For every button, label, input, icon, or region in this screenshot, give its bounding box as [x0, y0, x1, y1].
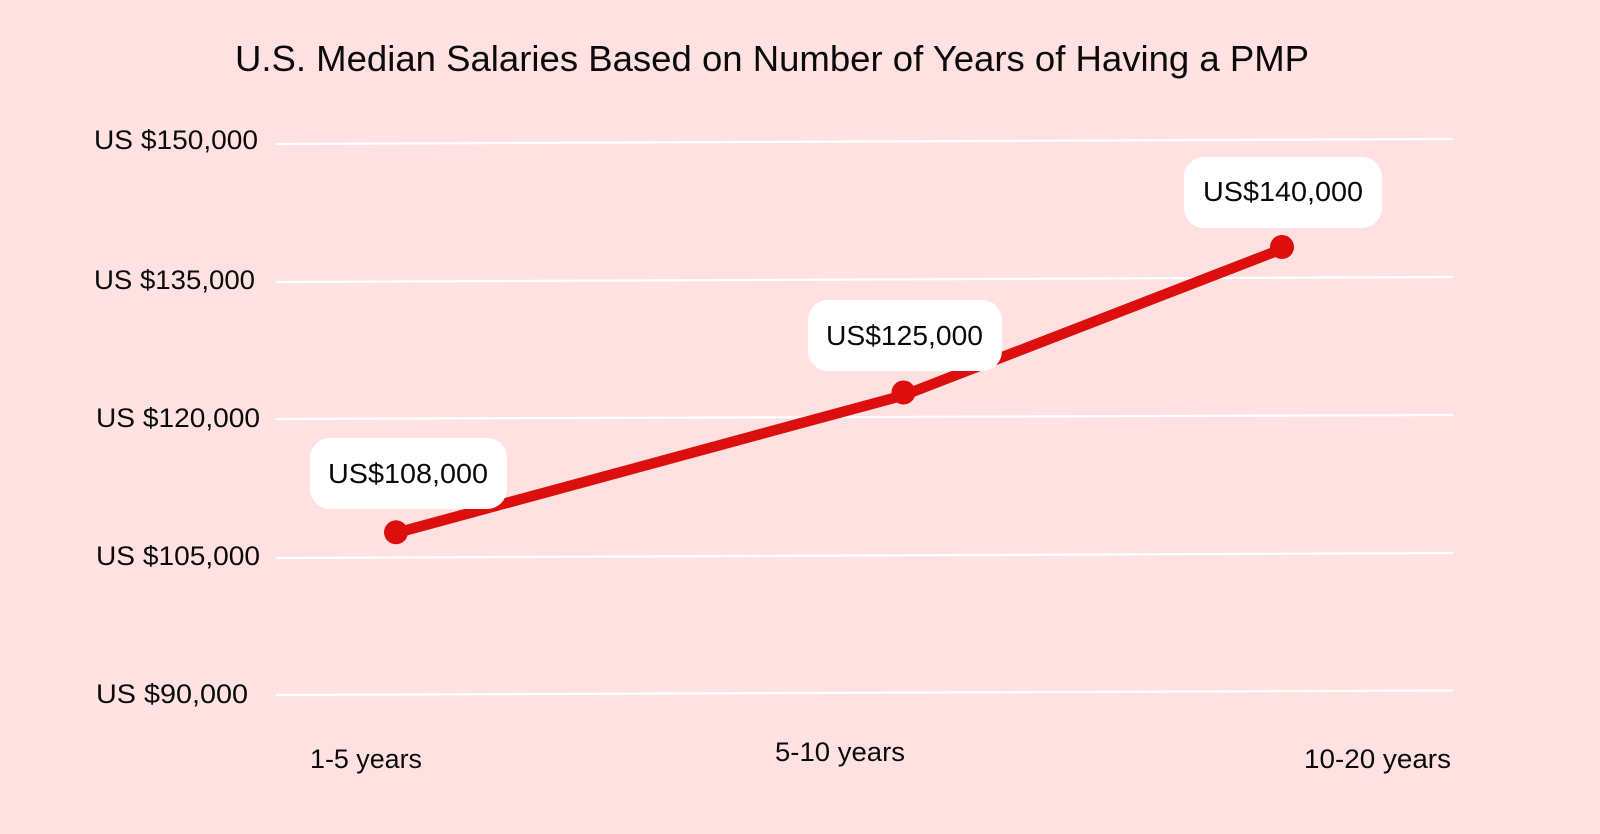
- y-axis labels: US $120,000: [96, 403, 260, 433]
- y-axis labels: US $105,000: [96, 541, 260, 571]
- y-axis labels: US $150,000: [94, 125, 258, 155]
- x-axis labels: 10-20 years: [1304, 744, 1451, 774]
- data point: 1-5 years: [384, 520, 408, 544]
- x-axis labels: 5-10 years: [775, 737, 905, 767]
- title: U.S. Median Salaries Based on Number of Years of Having a PMP: [235, 38, 1309, 79]
- x-axis labels: 1-5 years: [310, 744, 422, 774]
- gridlines: [276, 139, 1453, 695]
- data point: 5-10 years: [892, 380, 916, 404]
- callout: US$125,000: [808, 300, 1002, 371]
- callout: US$140,000: [1184, 157, 1382, 228]
- callout: US$125,000: US$125,000: [826, 320, 983, 351]
- callout: US$140,000: US$140,000: [1203, 176, 1363, 207]
- y-axis labels: [94, 125, 260, 709]
- x-axis labels: [310, 737, 1451, 774]
- data point: 10-20 years: [1270, 235, 1294, 259]
- callout: US$108,000: US$108,000: [328, 458, 488, 489]
- salary trend line: [396, 249, 1282, 533]
- callout: US$108,000: [310, 438, 507, 509]
- line chart: [94, 125, 1453, 774]
- y-axis labels: US $135,000: [94, 265, 255, 295]
- y-axis labels: US $90,000: [96, 679, 248, 709]
